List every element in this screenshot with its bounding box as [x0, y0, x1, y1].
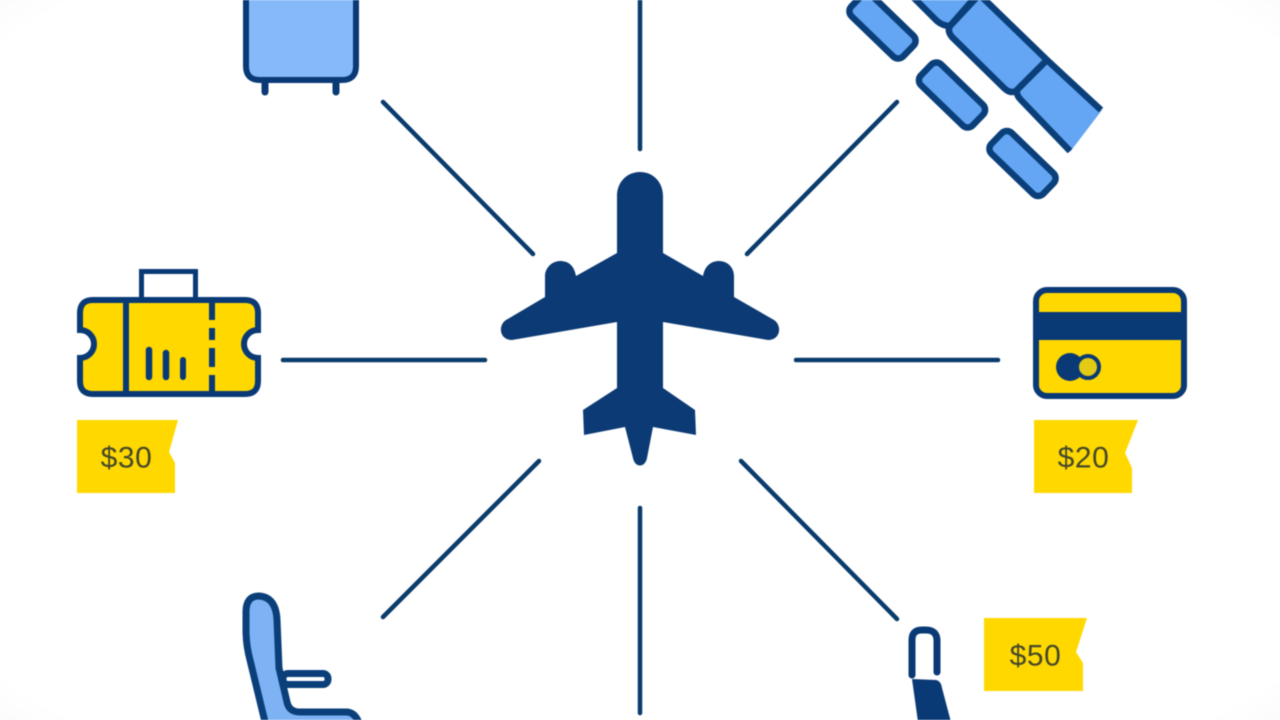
price tag: $30: [77, 420, 178, 493]
icon: yellow ticket luggage: [80, 272, 258, 394]
price tag: $50: [984, 618, 1087, 691]
icon: blue suitcase: [246, 0, 356, 92]
spoke lines radiating from the plane: [283, 0, 998, 713]
icon: row of blue seats: [847, 0, 1102, 199]
icon: central airplane: [501, 172, 779, 466]
price tag: $20: [1034, 420, 1138, 493]
price tag: $50: $50: [1010, 640, 1061, 672]
icon: seat, lower left: [246, 596, 360, 720]
price tag: $20: $20: [1058, 442, 1109, 474]
price tag: $30: $30: [101, 442, 152, 474]
icon: seat, lower right: [912, 630, 951, 720]
icon: yellow credit card: [1036, 290, 1184, 396]
